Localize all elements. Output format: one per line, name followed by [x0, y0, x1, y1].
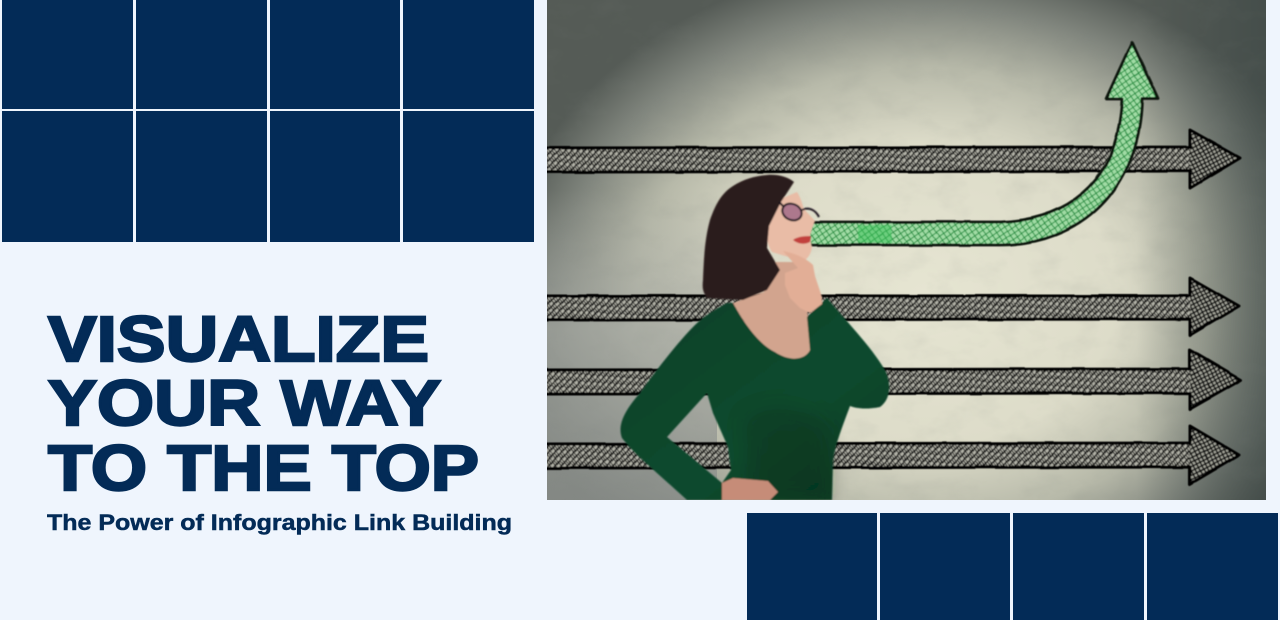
title — [48, 303, 479, 504]
glasses — [779, 201, 819, 223]
arrow 2: grey horizontal arrow — [540, 278, 1239, 335]
bottom-right navy tile row — [747, 513, 1278, 620]
title: TO THE TOP — [48, 432, 479, 504]
title: YOUR WAY — [48, 367, 441, 439]
concrete wall background — [547, 0, 1266, 500]
arrow 4: grey horizontal arrow — [540, 426, 1239, 484]
hand on chin — [783, 251, 822, 313]
top-left navy tile grid — [2, 0, 534, 242]
photo: woman looking at arrows on a wall — [540, 0, 1266, 500]
hair — [703, 175, 794, 300]
sweater body and arms — [621, 298, 889, 500]
arrow 3: grey horizontal arrow — [540, 350, 1241, 409]
green arrow curving upward — [805, 42, 1158, 245]
title: VISUALIZE — [48, 303, 429, 375]
sweater shading — [745, 408, 830, 500]
face — [767, 192, 815, 260]
arrow 1: grey horizontal arrow — [540, 130, 1240, 188]
neck and chest — [733, 262, 810, 359]
lips — [793, 236, 811, 244]
woman — [621, 175, 889, 500]
hand on hip — [722, 478, 778, 500]
subtitle: The Power of Infographic Link Building — [47, 510, 512, 535]
